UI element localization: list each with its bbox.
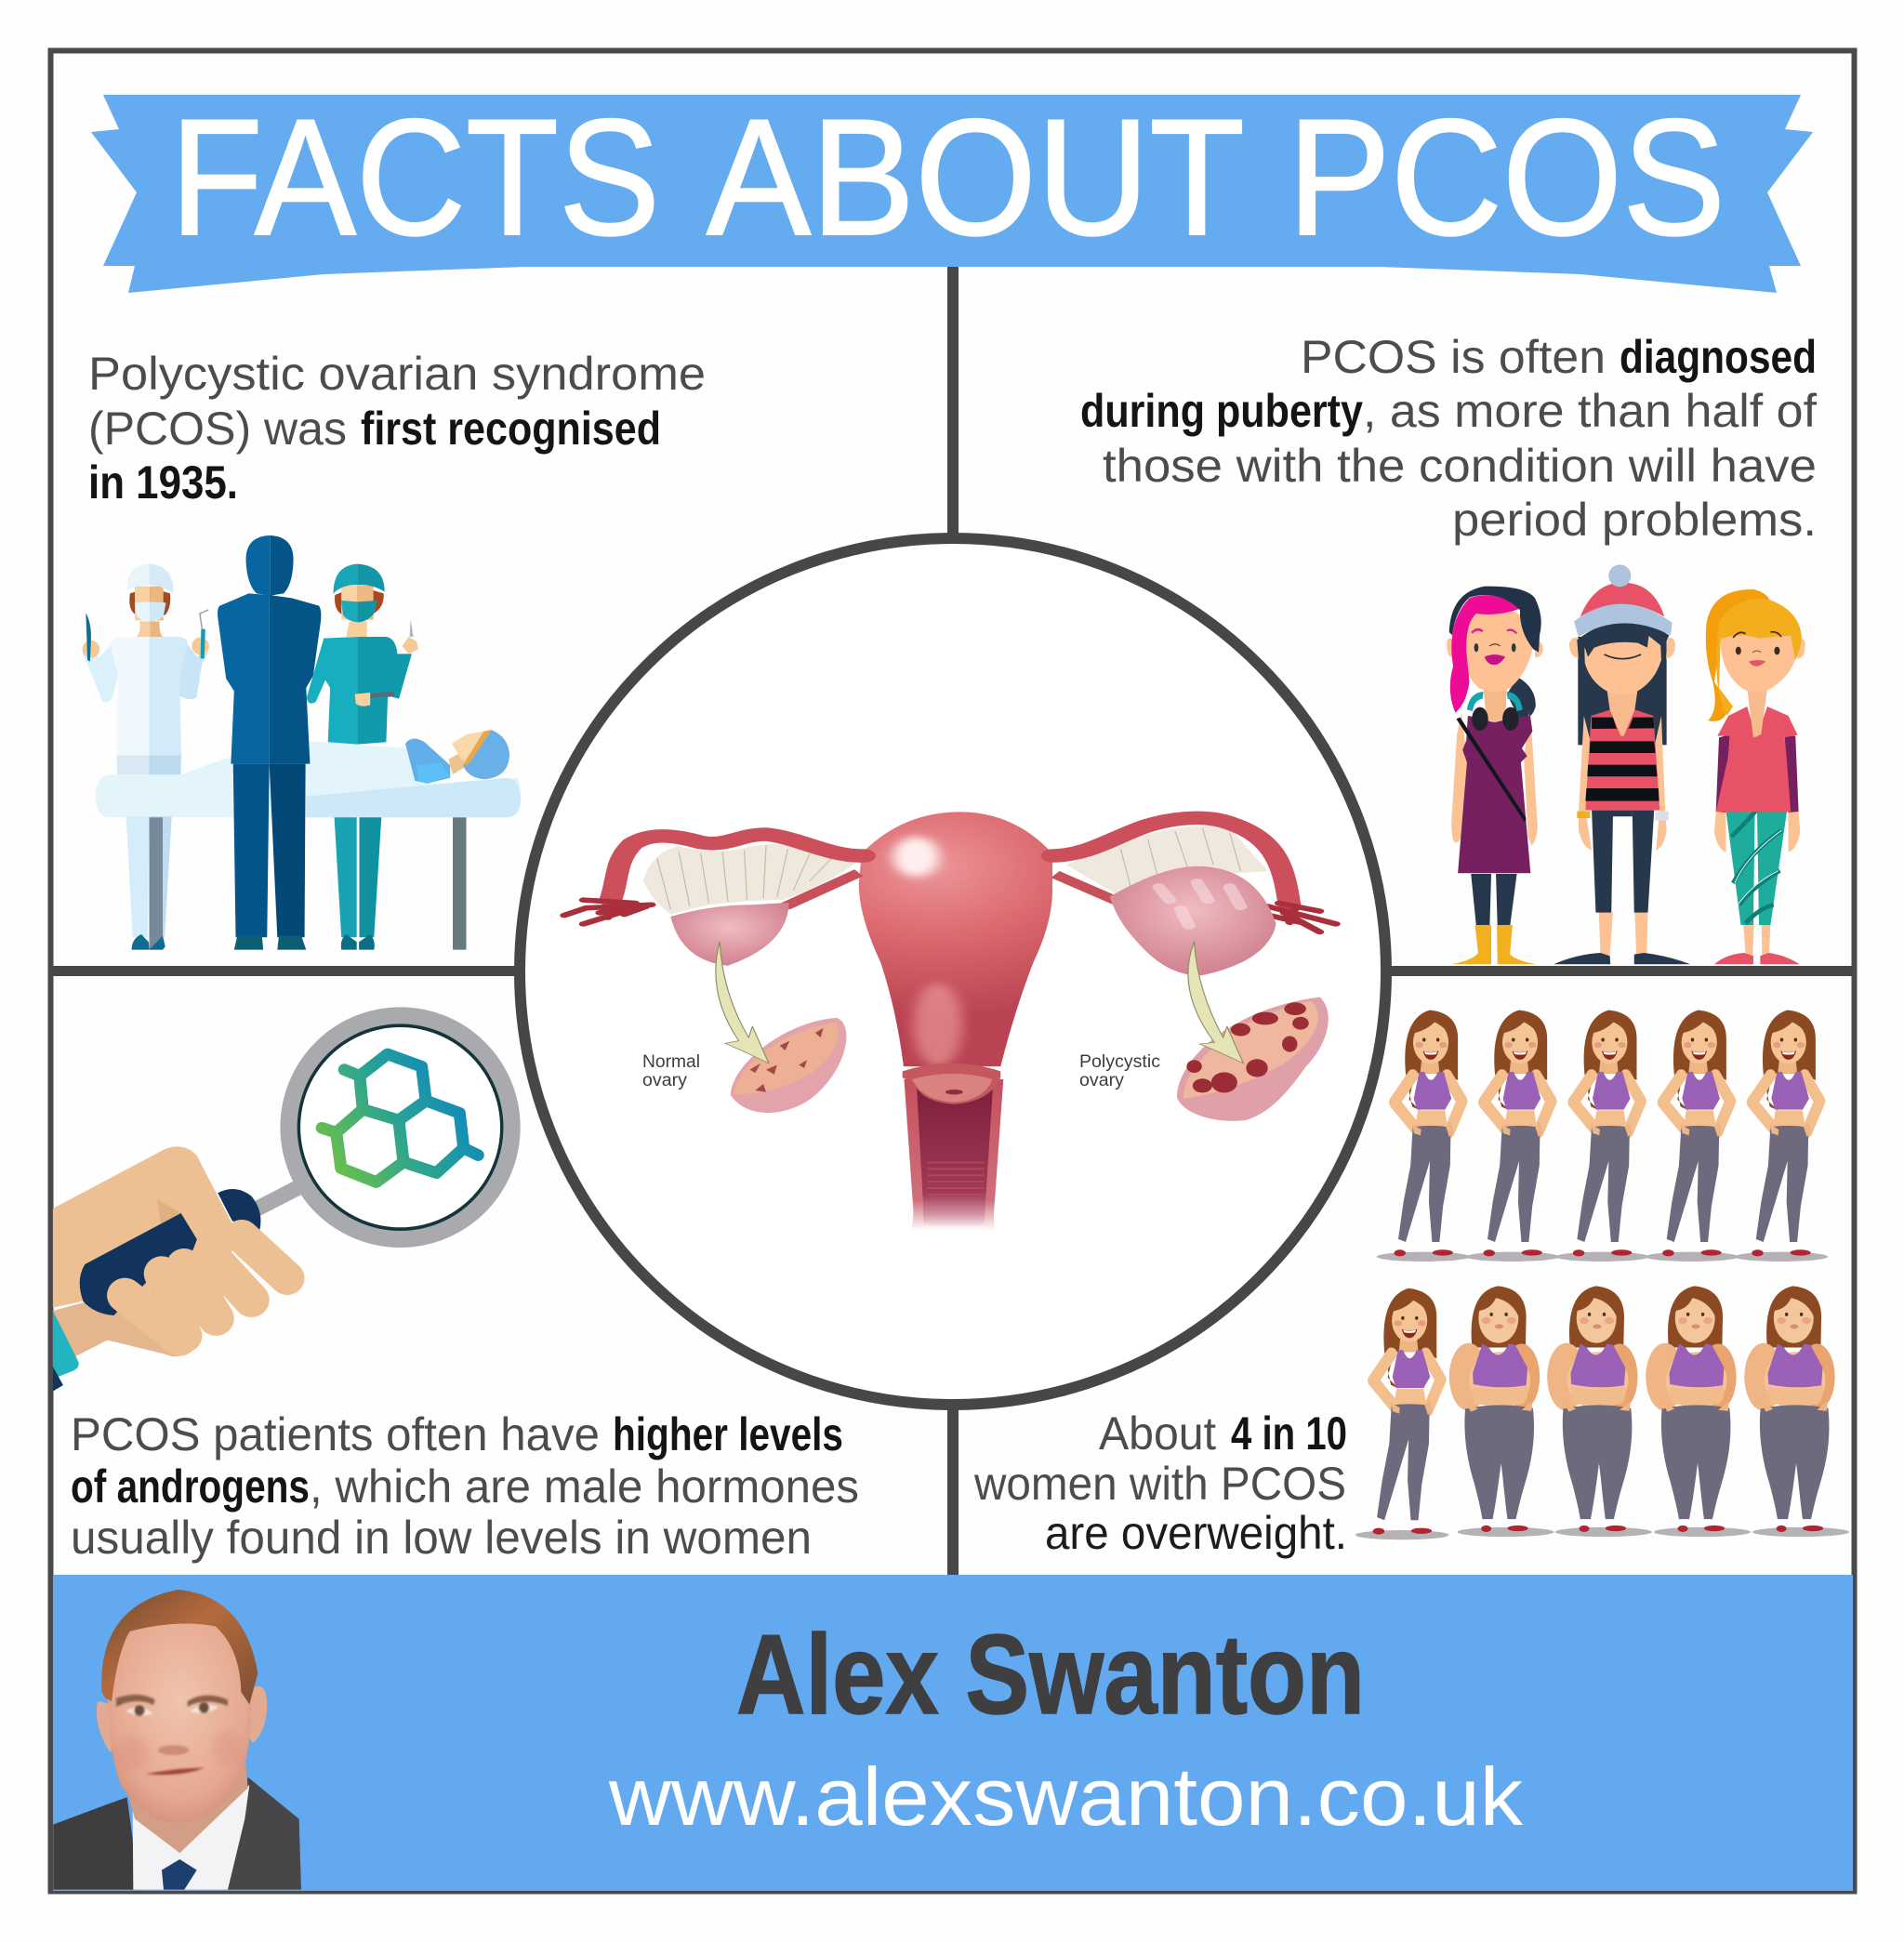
polycystic ovary cross-section [1177, 997, 1329, 1121]
uterus [859, 812, 1052, 1066]
right fimbriae [1257, 904, 1336, 932]
text block: diagnosed during puberty: diagnosed [1620, 331, 1817, 383]
divider lines [53, 266, 1854, 1577]
woman overweight 3 [1646, 1286, 1751, 1537]
right nurse [307, 564, 418, 950]
author name: Alex Swanton [736, 1611, 1365, 1737]
woman normal 6 [1355, 1288, 1448, 1539]
cervix [903, 1063, 1000, 1104]
label: polycystic ovary: ovary [1079, 1071, 1125, 1090]
right ovary [1110, 866, 1276, 975]
title: PCOS [1288, 85, 1726, 270]
woman normal 3 [1555, 1010, 1649, 1262]
website address: www.alexswanton.co.uk [608, 1750, 1524, 1843]
woman normal 2 [1466, 1010, 1559, 1262]
illustration: surgical team [82, 535, 521, 950]
text block: first recognised: (PCOS) was [88, 403, 347, 455]
text block: overweight: are overweight. [1045, 1507, 1347, 1559]
text block: androgens: , which are male hormones [310, 1460, 859, 1513]
hand [53, 1146, 287, 1392]
text block: first recognised: in 1935. [88, 456, 238, 509]
left fimbriae [564, 900, 652, 924]
patient [405, 730, 509, 784]
arrow: polycystic ovary [1188, 942, 1243, 1063]
text block: androgens: PCOS patients often have [71, 1408, 600, 1460]
right fallopian tube [1052, 818, 1289, 906]
text block: first recognised [88, 348, 706, 509]
label: polycystic ovary [1079, 1052, 1160, 1090]
title [170, 85, 1726, 270]
text block: diagnosed during puberty: during puberty [1080, 385, 1363, 437]
left surgeon [82, 564, 209, 950]
text block: overweight: About [1099, 1407, 1216, 1460]
label: polycystic ovary: Polycystic [1079, 1052, 1160, 1072]
text block: androgens: usually found in low levels in women [71, 1512, 812, 1564]
text block: diagnosed during puberty: PCOS is often [1301, 331, 1606, 383]
central circle [520, 538, 1386, 1405]
woman normal 4 [1646, 1010, 1739, 1262]
title: FACTS [170, 85, 660, 270]
label: normal ovary [642, 1052, 700, 1090]
left ovary [670, 903, 789, 966]
centre doctor [218, 535, 321, 950]
title: ABOUT [707, 85, 1245, 270]
left fallopian tube and ligament [611, 834, 865, 915]
text block: diagnosed during puberty: those with the condition will have [1103, 440, 1817, 492]
text block: first recognised: first recognised [361, 403, 661, 455]
woman overweight 1 [1449, 1286, 1554, 1537]
text block: diagnosed during puberty: period problems. [1452, 494, 1817, 546]
portrait photo [53, 1590, 301, 1890]
woman overweight 2 [1547, 1286, 1652, 1537]
normal ovary cross-section [731, 1018, 846, 1113]
woman overweight 4 [1744, 1286, 1849, 1537]
molecule icon [322, 1054, 478, 1182]
diagram: female reproductive system with ovaries [564, 812, 1336, 1231]
label: normal ovary: Normal [642, 1052, 700, 1072]
text block: androgens [71, 1408, 859, 1564]
text block: diagnosed during puberty [1080, 331, 1817, 546]
text block: androgens: higher levels [613, 1408, 843, 1460]
woman normal 5 [1735, 1010, 1828, 1262]
illustration: ten women, normal and overweight [1355, 1010, 1849, 1539]
woman normal 1 [1377, 1010, 1470, 1262]
illustration: magnifying glass held in hand [53, 1007, 521, 1392]
text block: overweight [973, 1407, 1347, 1559]
title banner [91, 85, 1813, 293]
text block: overweight: 4 in 10 [1231, 1407, 1347, 1460]
footer band [53, 1575, 1853, 1891]
text block: overweight: women with PCOS [973, 1458, 1346, 1510]
vagina [904, 1079, 1003, 1231]
magnifying glass [251, 1007, 521, 1248]
illustration: three teenage girls [1447, 564, 1805, 964]
girl with striped top and hat [1554, 564, 1690, 964]
girl with blonde hair [1706, 589, 1805, 964]
girl with pink hair [1447, 587, 1543, 964]
text block: diagnosed during puberty: , as more than half of [1363, 385, 1817, 437]
text block: first recognised: Polycystic ovarian syndrome [88, 348, 706, 400]
label: normal ovary: ovary [642, 1071, 688, 1090]
text block: androgens: of androgens [71, 1460, 310, 1513]
operating table [96, 741, 521, 950]
arrow: normal ovary [716, 942, 769, 1063]
